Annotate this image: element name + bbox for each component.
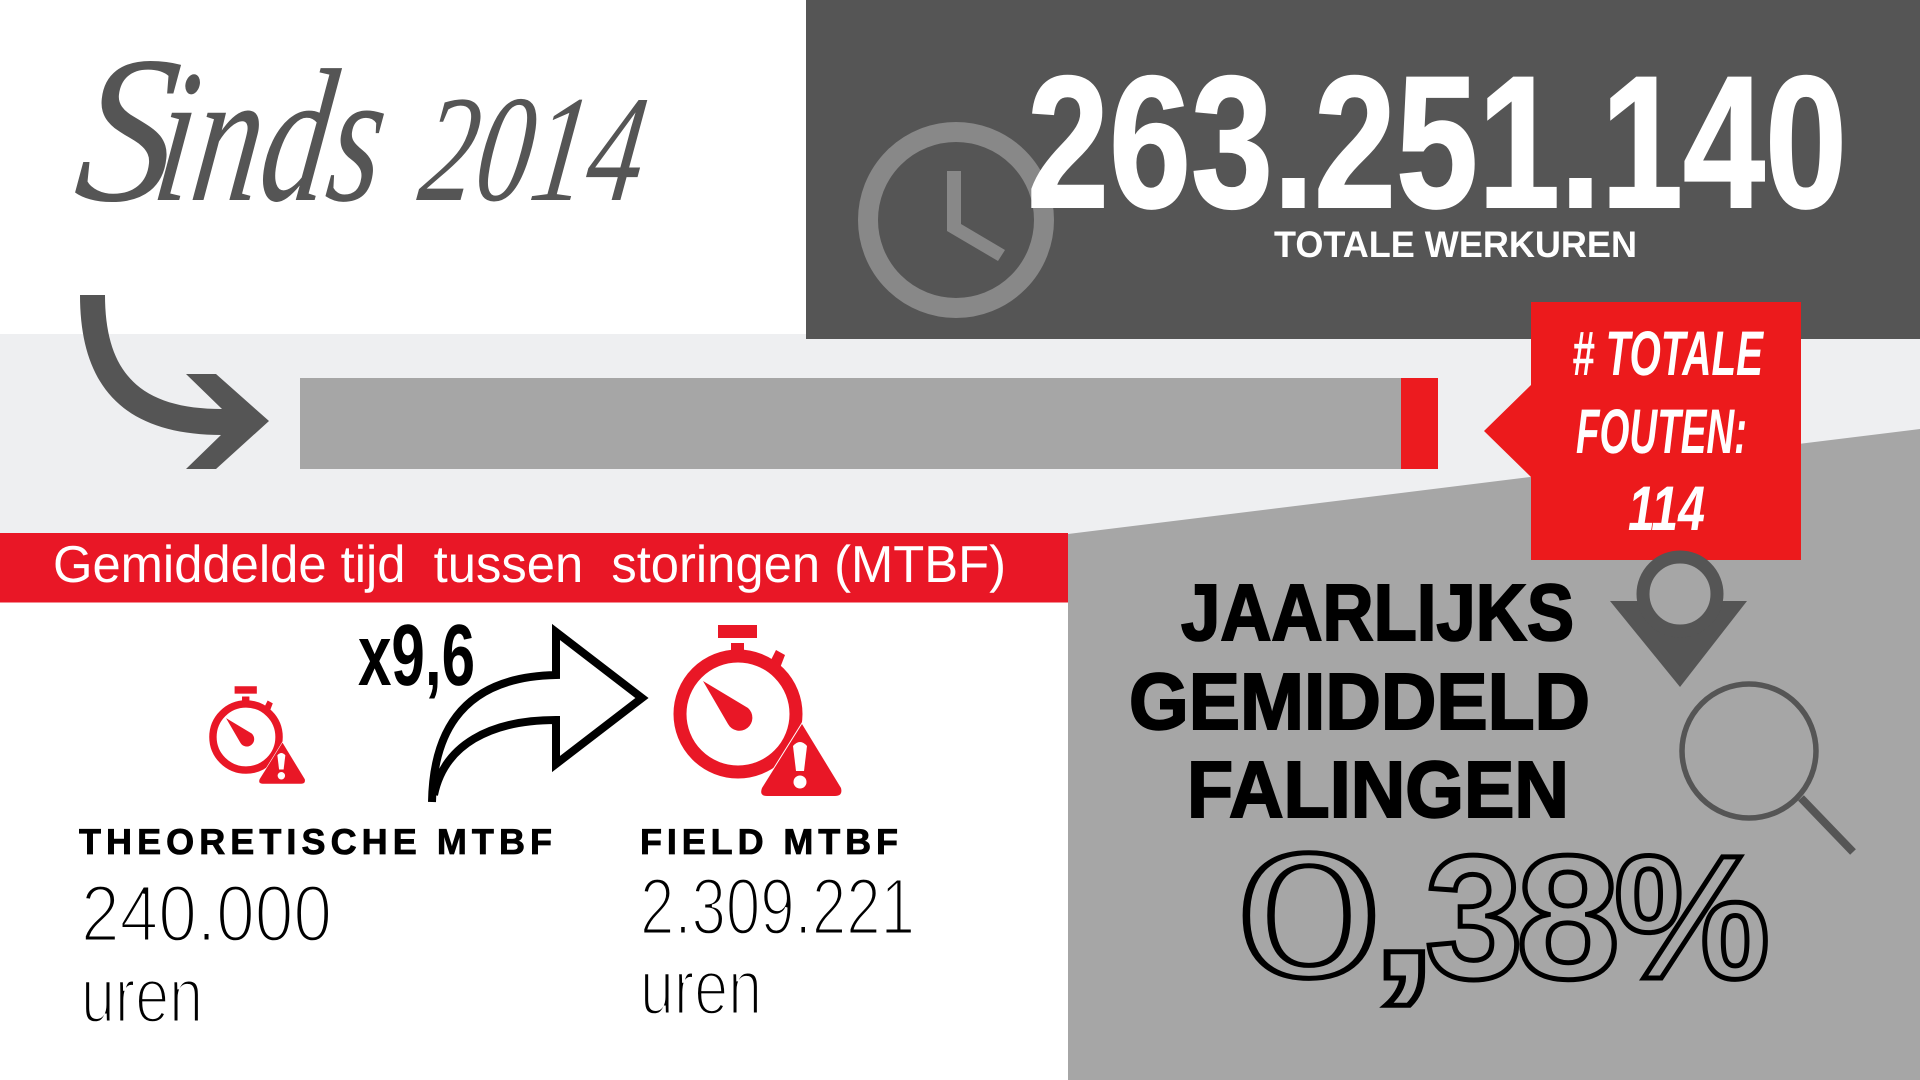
arrow: curved to bar (80, 295, 269, 469)
title: S (67, 14, 190, 246)
panel: total working hours (806, 0, 1920, 339)
title (67, 14, 657, 246)
bar segment: failures (1401, 378, 1438, 469)
panel: yearly failures background (1068, 429, 1920, 1080)
banner heading text: Gemiddelde tijd tussen storingen (MTBF) (53, 536, 1006, 594)
unit: field MTBF: uren (640, 943, 762, 1031)
heading: yearly average failures: GEMIDDELD (1129, 657, 1590, 746)
heading: yearly average failures: FALINGEN (1187, 745, 1569, 834)
icon: small stopwatch (213, 686, 305, 784)
arrow: theoretical to field (432, 632, 642, 802)
failure percentage (1230, 820, 1770, 1016)
label: theoretical MTBF: THEORETISCHE MTBF (79, 821, 552, 862)
icon: magnifying glass (1682, 684, 1853, 852)
icon: location pin (1610, 557, 1747, 687)
total hours label: TOTALE WERKUREN (1274, 224, 1637, 265)
panel: light grey band (0, 334, 1920, 534)
panel: light grey band right side (1068, 334, 1920, 444)
title: 2014 (411, 65, 657, 233)
value: theoretical MTBF: 240.000 (81, 869, 332, 958)
label: field MTBF: FIELD MTBF (640, 821, 898, 862)
failure percentage: , (1370, 820, 1438, 1016)
callout line 3: 114 (1628, 474, 1705, 544)
failure percentage: % (1614, 820, 1770, 1016)
callout line 2: FOUTEN: (1576, 397, 1747, 467)
value: field MTBF: 2.309.221 (640, 862, 915, 951)
bar chart: hours versus failures (300, 378, 1438, 469)
icon: large stopwatch (680, 625, 841, 796)
heading: yearly average failures (1129, 568, 1590, 834)
failure percentage: 3 (1425, 820, 1523, 1016)
icon: clock (868, 132, 1044, 308)
failure percentage: 0 (1230, 823, 1388, 1016)
multiplier label: x9,6 (358, 607, 475, 704)
heading banner: MTBF (0, 533, 1068, 602)
unit: theoretical MTBF: uren (81, 951, 203, 1039)
title: inds (144, 32, 400, 242)
callout: total failures (1484, 302, 1801, 560)
failure percentage: 8 (1516, 820, 1620, 1016)
callout line 1: # TOTALE (1572, 319, 1764, 389)
heading: yearly average failures: JAARLIJKS (1181, 568, 1574, 657)
